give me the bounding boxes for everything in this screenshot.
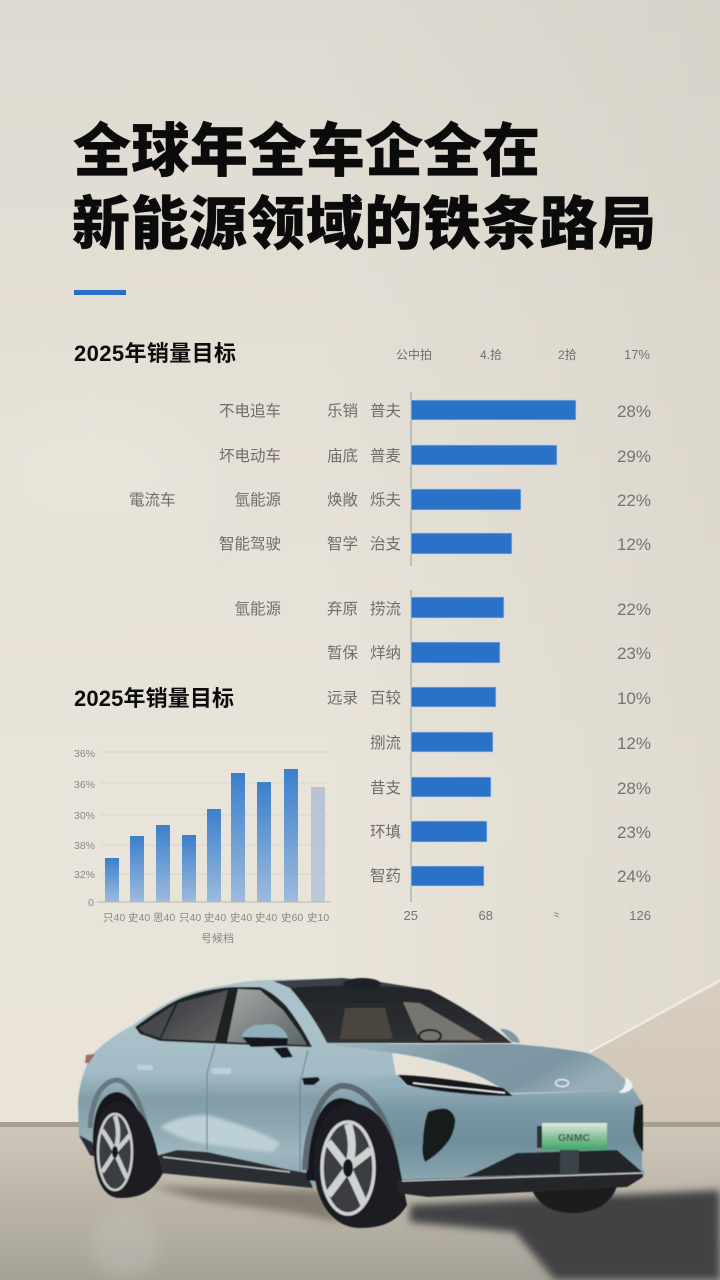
row 3: 電流车 xyxy=(129,491,176,509)
row 11: 智药 xyxy=(370,867,401,885)
row 7: 远录 xyxy=(327,689,358,707)
hood logo xyxy=(556,1080,568,1086)
front wheel xyxy=(314,1103,407,1228)
roof sensor xyxy=(343,978,381,990)
x axis labels: 史40 xyxy=(204,912,226,924)
fender and front fascia xyxy=(330,1075,645,1183)
x axis labels: 只40 xyxy=(103,912,125,924)
upper chart column headers: 2拾 xyxy=(558,347,577,362)
lower bumper xyxy=(397,1172,643,1197)
y axis labels: 32% xyxy=(74,869,95,881)
row 6: 烊纳 xyxy=(370,644,401,662)
x axis labels: 史40 xyxy=(255,912,277,924)
y axis labels: 36% xyxy=(74,748,95,760)
windshield xyxy=(290,986,512,1043)
x axis labels: 史40 xyxy=(230,912,252,924)
taillight xyxy=(85,1054,95,1063)
row 8 xyxy=(370,732,651,753)
licence plate xyxy=(537,1123,607,1150)
row 1 xyxy=(219,400,651,421)
row 3: 烁夫 xyxy=(370,491,401,509)
right air intake xyxy=(633,1104,643,1152)
upper chart column headers: 17% xyxy=(624,347,650,362)
licence plate: GNMC xyxy=(558,1132,590,1144)
title accent line xyxy=(74,290,126,295)
horizontal bar chart: upper group xyxy=(129,392,651,566)
dark roof xyxy=(273,978,430,990)
far side mirror xyxy=(500,1029,520,1043)
upper chart column headers: 4.拾 xyxy=(480,347,502,362)
row 10: 23% xyxy=(617,823,651,842)
row 8: 捌流 xyxy=(370,734,401,752)
x axis labels: 史60 xyxy=(281,912,303,924)
row 1: 普夫 xyxy=(370,402,401,420)
x axis labels: 史10 xyxy=(307,912,329,924)
rear valance xyxy=(79,1135,96,1157)
row 2: 坏电动车 xyxy=(219,447,281,465)
sill xyxy=(152,1150,313,1188)
wall wedge xyxy=(560,980,720,1123)
ground shadow xyxy=(150,1186,340,1222)
heading: upper chart: 2025年销量目标 xyxy=(74,341,236,366)
title xyxy=(72,119,656,257)
y axis labels: 36% xyxy=(74,779,95,791)
row 2 xyxy=(219,445,651,466)
rear door window xyxy=(161,990,228,1041)
row 5: 弃原 xyxy=(327,600,358,618)
row 3: 22% xyxy=(617,491,651,510)
row 1: 28% xyxy=(617,402,651,421)
row 2: 普麦 xyxy=(370,447,401,465)
row 5: 捞流 xyxy=(370,600,401,618)
column chart xyxy=(74,748,331,945)
title: 全球年全车企全在 xyxy=(73,119,540,184)
columns xyxy=(105,769,325,902)
row 11: 24% xyxy=(617,867,651,886)
upper chart column headers xyxy=(396,347,650,362)
row 10: 环填 xyxy=(370,823,401,841)
front wheel well and arch xyxy=(305,1086,400,1190)
rear wheel xyxy=(94,1102,163,1198)
y axis labels: 38% xyxy=(74,840,95,852)
wing mirror xyxy=(242,1024,293,1058)
x axis labels xyxy=(103,912,329,924)
row 3 xyxy=(129,489,651,510)
row 9: 昔支 xyxy=(370,779,401,797)
x axis labels: 史40 xyxy=(128,912,150,924)
title: 新能源领域的铁条路局 xyxy=(72,192,656,257)
row 10 xyxy=(370,821,651,842)
row 7: 10% xyxy=(617,689,651,708)
row 2: 庙底 xyxy=(327,447,358,465)
row 5 xyxy=(234,597,651,619)
row 7: 百较 xyxy=(370,689,401,707)
row 2: 29% xyxy=(617,447,651,466)
upper chart column headers: 公中拍 xyxy=(396,347,432,362)
y axis labels: 0 xyxy=(88,897,94,909)
car body side xyxy=(78,978,400,1187)
front door window xyxy=(227,989,307,1045)
row 4: 12% xyxy=(617,535,651,554)
grille xyxy=(463,1150,642,1177)
x axis labels: 思40 xyxy=(153,912,175,924)
row 3: 氫能源 xyxy=(234,491,281,509)
row 6: 23% xyxy=(617,644,651,663)
windshield interior xyxy=(403,1002,483,1040)
rear wheel well and arch xyxy=(90,1080,152,1160)
row 3: 焕敞 xyxy=(327,491,359,509)
far front wheel xyxy=(532,1186,617,1213)
left air intake xyxy=(422,1109,455,1162)
horizontal bar chart: lower group xyxy=(234,590,651,923)
right headlight xyxy=(618,1077,633,1093)
bar chart axis labels: 126 xyxy=(629,908,651,923)
row 4: 治支 xyxy=(370,535,401,553)
y axis labels xyxy=(74,748,95,909)
bar chart axis labels: 68 xyxy=(479,908,493,923)
rear quarter window xyxy=(139,1004,175,1038)
car illustration xyxy=(78,978,645,1228)
row 9: 28% xyxy=(617,779,651,798)
bar chart axis labels: 25 xyxy=(404,908,418,923)
floor xyxy=(0,1122,720,1280)
row 1: 乐销 xyxy=(327,402,358,420)
window surround xyxy=(135,987,312,1047)
row 8: 12% xyxy=(617,734,651,753)
steering wheel xyxy=(419,1030,441,1042)
y axis labels: 30% xyxy=(74,810,95,822)
bar chart axis labels: ⺀ xyxy=(551,911,562,923)
row 4: 智学 xyxy=(327,535,358,553)
x axis labels: 只40 xyxy=(179,912,201,924)
side highlight xyxy=(160,1115,280,1152)
row 1: 不电追车 xyxy=(219,402,281,420)
row 11 xyxy=(370,866,651,886)
row 5: 22% xyxy=(617,600,651,619)
front seat xyxy=(340,1008,393,1039)
door seams and handles xyxy=(137,1045,320,1172)
hood xyxy=(327,1044,632,1093)
row 6 xyxy=(327,642,651,663)
row 5: 氫能源 xyxy=(234,600,281,618)
bar chart axis labels xyxy=(404,908,651,923)
row 7 xyxy=(327,687,651,708)
row 6: 暂保 xyxy=(327,644,359,662)
heading: lower chart: 2025年销量目标 xyxy=(74,686,234,711)
row 4 xyxy=(219,533,651,554)
x axis caption: 号候档 xyxy=(201,931,234,945)
headlight xyxy=(398,1075,513,1096)
row 9 xyxy=(370,777,651,798)
row 4: 智能驾驶 xyxy=(219,535,281,553)
